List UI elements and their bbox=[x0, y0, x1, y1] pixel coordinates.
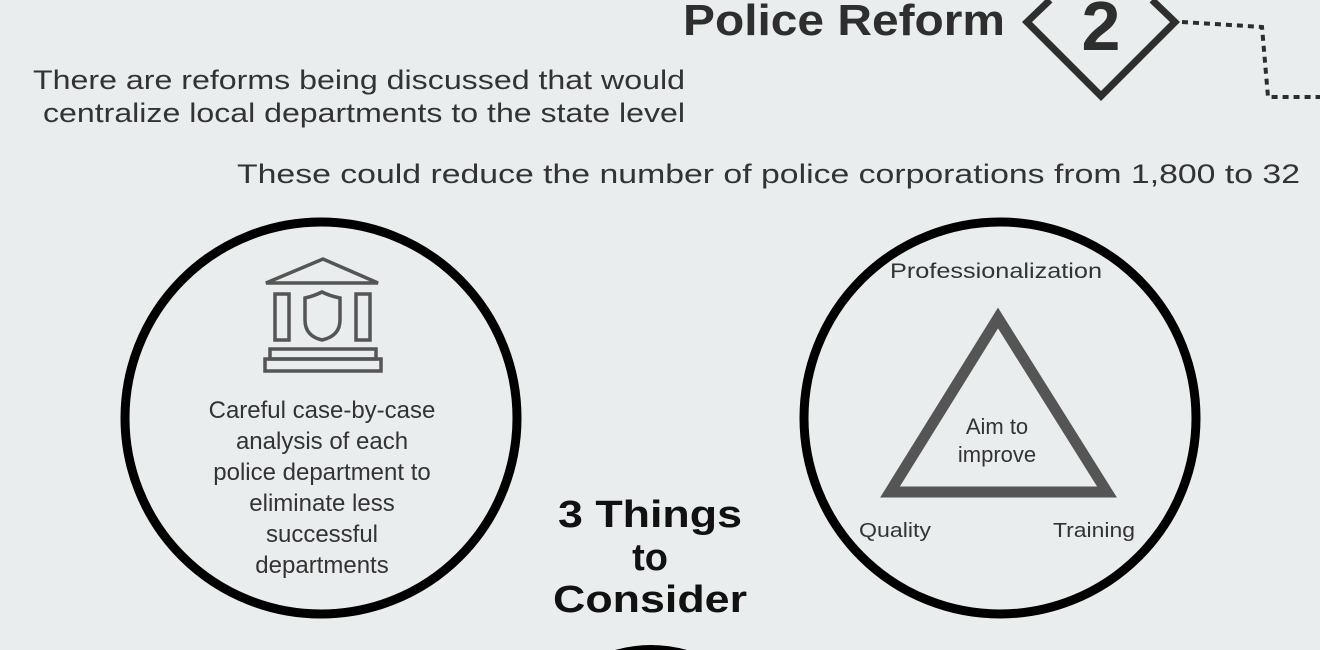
text block: reforms intro bbox=[33, 65, 685, 128]
heading: 3 things to consider: to bbox=[632, 537, 668, 579]
heading: 3 things to consider bbox=[553, 494, 747, 621]
label: aim to improve: Aim to bbox=[966, 414, 1028, 439]
text block: careful analysis: successful bbox=[266, 521, 378, 548]
text block: careful analysis: Careful case-by-case bbox=[209, 397, 435, 424]
text block: careful analysis: analysis of each bbox=[236, 428, 408, 455]
text block: reforms intro: There are reforms being discussed that would bbox=[33, 65, 685, 95]
panel: left circle bbox=[125, 222, 517, 614]
label: aim to improve: improve bbox=[958, 442, 1036, 467]
text block: careful analysis: eliminate less bbox=[249, 490, 395, 517]
text block: careful analysis bbox=[209, 397, 435, 579]
label: Professionalization: Professionalization bbox=[890, 260, 1102, 283]
text block: careful analysis: departments bbox=[255, 552, 389, 579]
heading: 3 things to consider: 3 Things bbox=[558, 494, 742, 536]
text block: careful analysis: police department to bbox=[213, 459, 431, 486]
chart: improvement triangle bbox=[890, 318, 1107, 492]
label: Quality: Quality bbox=[859, 520, 931, 542]
icon: bottom black circle bbox=[615, 645, 687, 650]
label: aim to improve bbox=[958, 414, 1036, 467]
heading: 3 things to consider: Consider bbox=[553, 579, 747, 621]
text block: reforms intro: centralize local departments to the state level bbox=[43, 98, 685, 128]
label: Training: Training bbox=[1053, 520, 1135, 542]
icon: courthouse with shield bbox=[265, 259, 381, 371]
arrow: dotted connector bbox=[1182, 22, 1320, 97]
text block: reduction: These could reduce the number of police corporations from 1,800 to 32 bbox=[237, 159, 1300, 189]
icon: numbered diamond bbox=[1027, 0, 1175, 96]
panel: right circle bbox=[804, 222, 1196, 614]
